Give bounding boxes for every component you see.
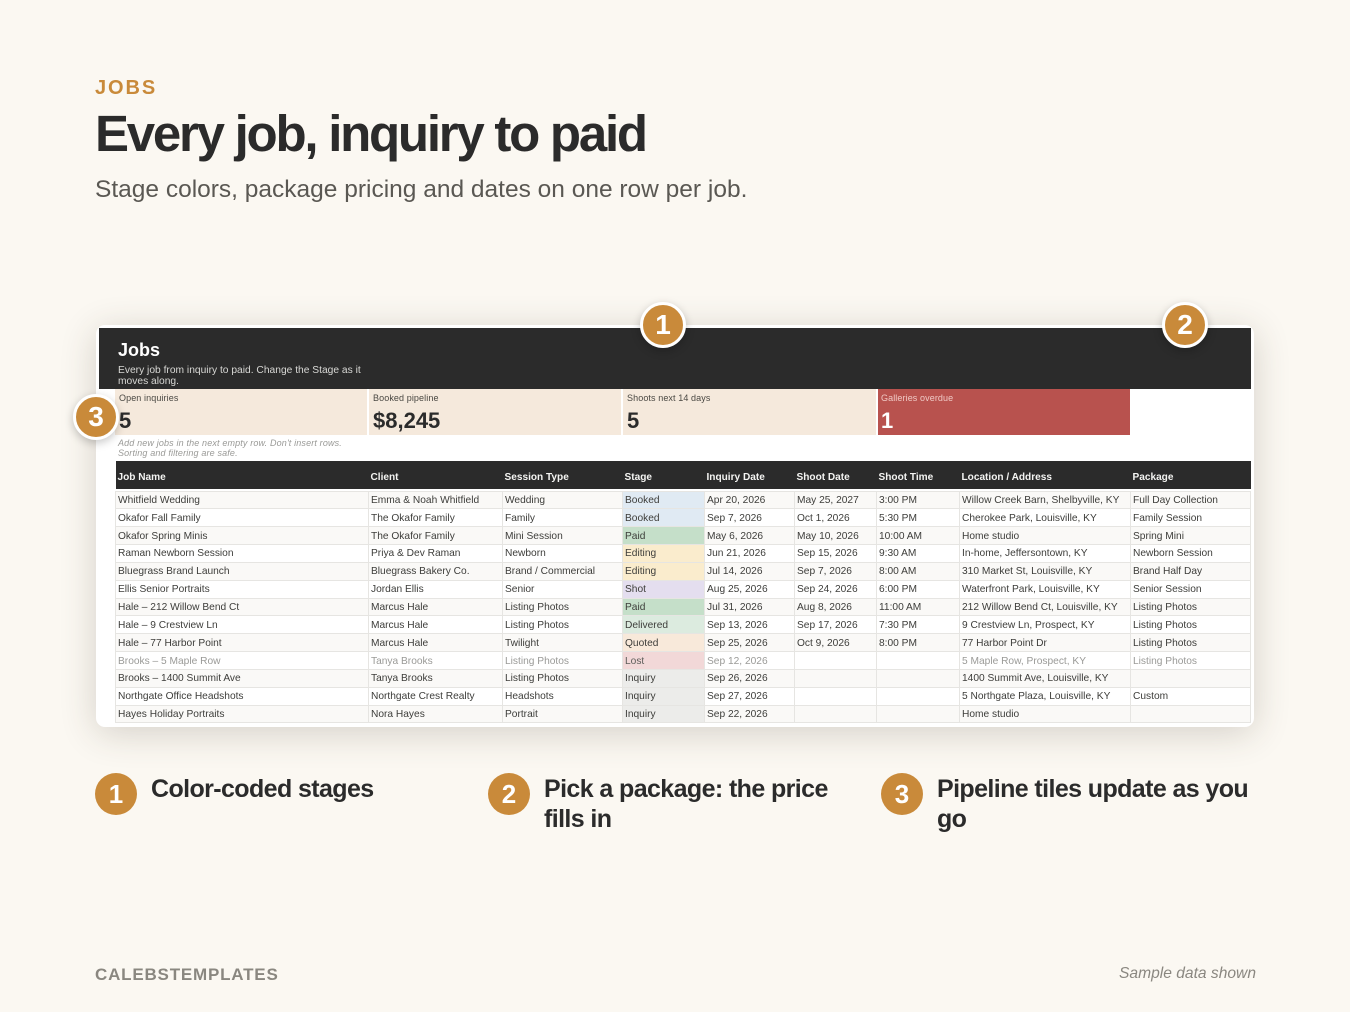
jobs table: 11:00 AM [879,602,921,613]
tile: booked pipeline: $8,245 [373,408,440,433]
callout badge 3: 3 [88,401,104,432]
jobs table: Wedding [505,495,545,506]
jobs table: Paid [625,602,645,613]
jobs table: Marcus Hale [371,638,428,649]
jobs table: Delivered [625,620,668,631]
instruction note: Sorting and filtering are safe. [118,448,238,458]
jobs table: Shot [625,584,646,595]
jobs table: Booked [625,495,660,506]
tile: galleries overdue: 1 [881,408,893,433]
jobs table: The Okafor Family [371,531,455,542]
jobs table: Home studio [962,531,1019,542]
jobs table: Emma & Noah Whitfield [371,495,479,506]
sheet description [118,364,361,387]
jobs table: Home studio [962,709,1019,720]
jobs table: Portrait [505,709,538,720]
jobs table: Hayes Holiday Portraits [118,709,224,720]
jobs table: Brand / Commercial [505,566,595,577]
jobs table: Client [370,472,399,482]
jobs table: Spring Mini [1133,531,1184,542]
jobs table: Okafor Spring Minis [118,531,207,542]
sheet description: Every job from inquiry to paid. Change the Stage as it [118,364,361,376]
jobs table: Sep 7, 2026 [707,513,762,524]
jobs table: Priya & Dev Raman [371,548,460,559]
jobs table: 9:30 AM [879,548,916,559]
jobs table: Sep 27, 2026 [707,691,768,702]
jobs table: Sep 15, 2026 [797,548,858,559]
jobs table: The Okafor Family [371,513,455,524]
jobs table: Sep 13, 2026 [707,620,768,631]
jobs table: Job Name [118,472,166,482]
jobs table: Marcus Hale [371,602,428,613]
jobs table [115,461,1251,723]
jobs table: May 10, 2026 [797,531,859,542]
jobs table: Newborn [505,548,546,559]
jobs table: Raman Newborn Session [118,548,234,559]
jobs table: 1400 Summit Ave, Louisville, KY [962,673,1108,684]
jobs table: Listing Photos [1133,620,1197,631]
jobs table: 5:30 PM [879,513,917,524]
jobs table: Shoot Date [796,472,850,482]
jobs table: Listing Photos [505,656,569,667]
sheet title: Jobs [118,340,160,360]
jobs table: Location / Address [962,472,1052,482]
jobs table: Senior [505,584,534,595]
sheet header band [99,328,1251,389]
step 1 text: Color-coded stages [151,775,374,803]
jobs table: Stage [624,472,652,482]
jobs table: Custom [1133,691,1168,702]
jobs table: Aug 25, 2026 [707,584,768,595]
tile: open inquiries: 5 [119,408,131,433]
tile: shoots next 14 days [623,389,876,435]
section eyebrow: JOBS [95,77,157,99]
jobs table: Jul 14, 2026 [707,566,763,577]
jobs table: Editing [625,566,656,577]
footer brand: CALEBSTEMPLATES [95,964,279,984]
jobs table: Brooks – 5 Maple Row [118,656,220,667]
step 1 number [95,773,137,815]
tile: open inquiries [115,389,367,435]
jobs table: Waterfront Park, Louisville, KY [962,584,1100,595]
callout badge 2 [1162,302,1208,348]
callout badge 1: 1 [655,309,671,340]
jobs table: Whitfield Wedding [118,495,200,506]
jobs table: Listing Photos [1133,638,1197,649]
tile: galleries overdue [878,389,1130,435]
jobs table: Cherokee Park, Louisville, KY [962,513,1097,524]
jobs table: 6:00 PM [879,584,917,595]
jobs table: Northgate Crest Realty [371,691,475,702]
jobs table: Listing Photos [505,620,569,631]
title: Every job, inquiry to paid [95,105,646,162]
jobs table: Jun 21, 2026 [707,548,766,559]
jobs table: Oct 9, 2026 [797,638,850,649]
jobs table: 8:00 PM [879,638,917,649]
jobs table: 5 Northgate Plaza, Louisville, KY [962,691,1110,702]
jobs table: Inquiry [625,709,656,720]
jobs table: Oct 1, 2026 [797,513,850,524]
jobs table: Willow Creek Barn, Shelbyville, KY [962,495,1119,506]
jobs table: Sep 24, 2026 [797,584,858,595]
jobs table: Northgate Office Headshots [118,691,244,702]
jobs table: Shoot Time [878,472,933,482]
jobs table: May 6, 2026 [707,531,763,542]
jobs table: Family Session [1133,513,1202,524]
jobs table: Twilight [505,638,539,649]
jobs table: Inquiry Date [706,472,765,482]
jobs table: Hale – 212 Willow Bend Ct [118,602,239,613]
tile: galleries overdue: Galleries overdue [881,393,953,403]
jobs table: Apr 20, 2026 [707,495,765,506]
jobs table: Inquiry [625,691,656,702]
jobs table: Sep 7, 2026 [797,566,852,577]
jobs table: Ellis Senior Portraits [118,584,210,595]
jobs table: Package [1132,472,1173,482]
tile: shoots next 14 days: Shoots next 14 days [627,393,710,403]
jobs table: Sep 17, 2026 [797,620,858,631]
jobs table: Okafor Fall Family [118,513,201,524]
tile: booked pipeline: Booked pipeline [373,393,439,403]
jobs table: Jordan Ellis [371,584,424,595]
tile: booked pipeline [369,389,621,435]
step 3 text: Pipeline tiles update as you go [937,775,1248,833]
jobs table: Family [505,513,535,524]
jobs table: Paid [625,531,645,542]
jobs table: Listing Photos [505,602,569,613]
subtitle: Stage colors, package pricing and dates on one row per job. [95,176,747,203]
jobs table: 212 Willow Bend Ct, Louisville, KY [962,602,1118,613]
jobs table: Hale – 77 Harbor Point [118,638,222,649]
jobs table: Sep 22, 2026 [707,709,768,720]
jobs table: Tanya Brooks [371,656,433,667]
jobs table: Brand Half Day [1133,566,1202,577]
jobs table: Bluegrass Brand Launch [118,566,230,577]
jobs table: Listing Photos [505,673,569,684]
step 3 number [881,773,923,815]
jobs table: 9 Crestview Ln, Prospect, KY [962,620,1094,631]
instruction note [118,438,342,458]
step 2 text: Pick a package: the price fills in [544,775,828,833]
jobs table: Sep 12, 2026 [707,656,768,667]
jobs table: 10:00 AM [879,531,922,542]
footer note: Sample data shown [1119,965,1256,982]
jobs table: Inquiry [625,673,656,684]
jobs table: Tanya Brooks [371,673,433,684]
jobs table: 8:00 AM [879,566,916,577]
jobs table: Aug 8, 2026 [797,602,852,613]
jobs table: Nora Hayes [371,709,425,720]
jobs table: 77 Harbor Point Dr [962,638,1047,649]
jobs table: Booked [625,513,660,524]
jobs table: Senior Session [1133,584,1202,595]
jobs table: Full Day Collection [1133,495,1218,506]
step 2 number: 2 [502,779,516,809]
jobs table: Listing Photos [1133,602,1197,613]
jobs table: Sep 25, 2026 [707,638,768,649]
jobs table: In-home, Jeffersontown, KY [962,548,1088,559]
sheet description: moves along. [118,376,179,387]
jobs table: 7:30 PM [879,620,917,631]
jobs table: 3:00 PM [879,495,917,506]
jobs table: 310 Market St, Louisville, KY [962,566,1092,577]
jobs table: Mini Session [505,531,563,542]
jobs table: Lost [625,656,644,667]
jobs table: Headshots [505,691,554,702]
tile: open inquiries: Open inquiries [119,393,178,403]
jobs table: Marcus Hale [371,620,428,631]
jobs table: 5 Maple Row, Prospect, KY [962,656,1086,667]
jobs table: Sep 26, 2026 [707,673,768,684]
jobs table: Quoted [625,638,658,649]
callout badge 1 [640,302,686,348]
jobs table: Editing [625,548,656,559]
jobs table: Newborn Session [1133,548,1213,559]
jobs table: Bluegrass Bakery Co. [371,566,470,577]
jobs table: Hale – 9 Crestview Ln [118,620,218,631]
jobs table: Jul 31, 2026 [707,602,763,613]
jobs table: Listing Photos [1133,656,1197,667]
jobs table: Session Type [504,472,569,482]
instruction note: Add new jobs in the next empty row. Don't insert rows. [118,438,342,448]
callout badge 3 [73,394,119,440]
step 3 number: 3 [895,779,909,809]
panel: spreadsheet card [96,325,1254,727]
step 1 number: 1 [109,779,123,809]
jobs table: Brooks – 1400 Summit Ave [118,673,241,684]
jobs table: May 25, 2027 [797,495,859,506]
step 2 number [488,773,530,815]
tile: shoots next 14 days: 5 [627,408,639,433]
callout badge 2: 2 [1177,309,1193,340]
